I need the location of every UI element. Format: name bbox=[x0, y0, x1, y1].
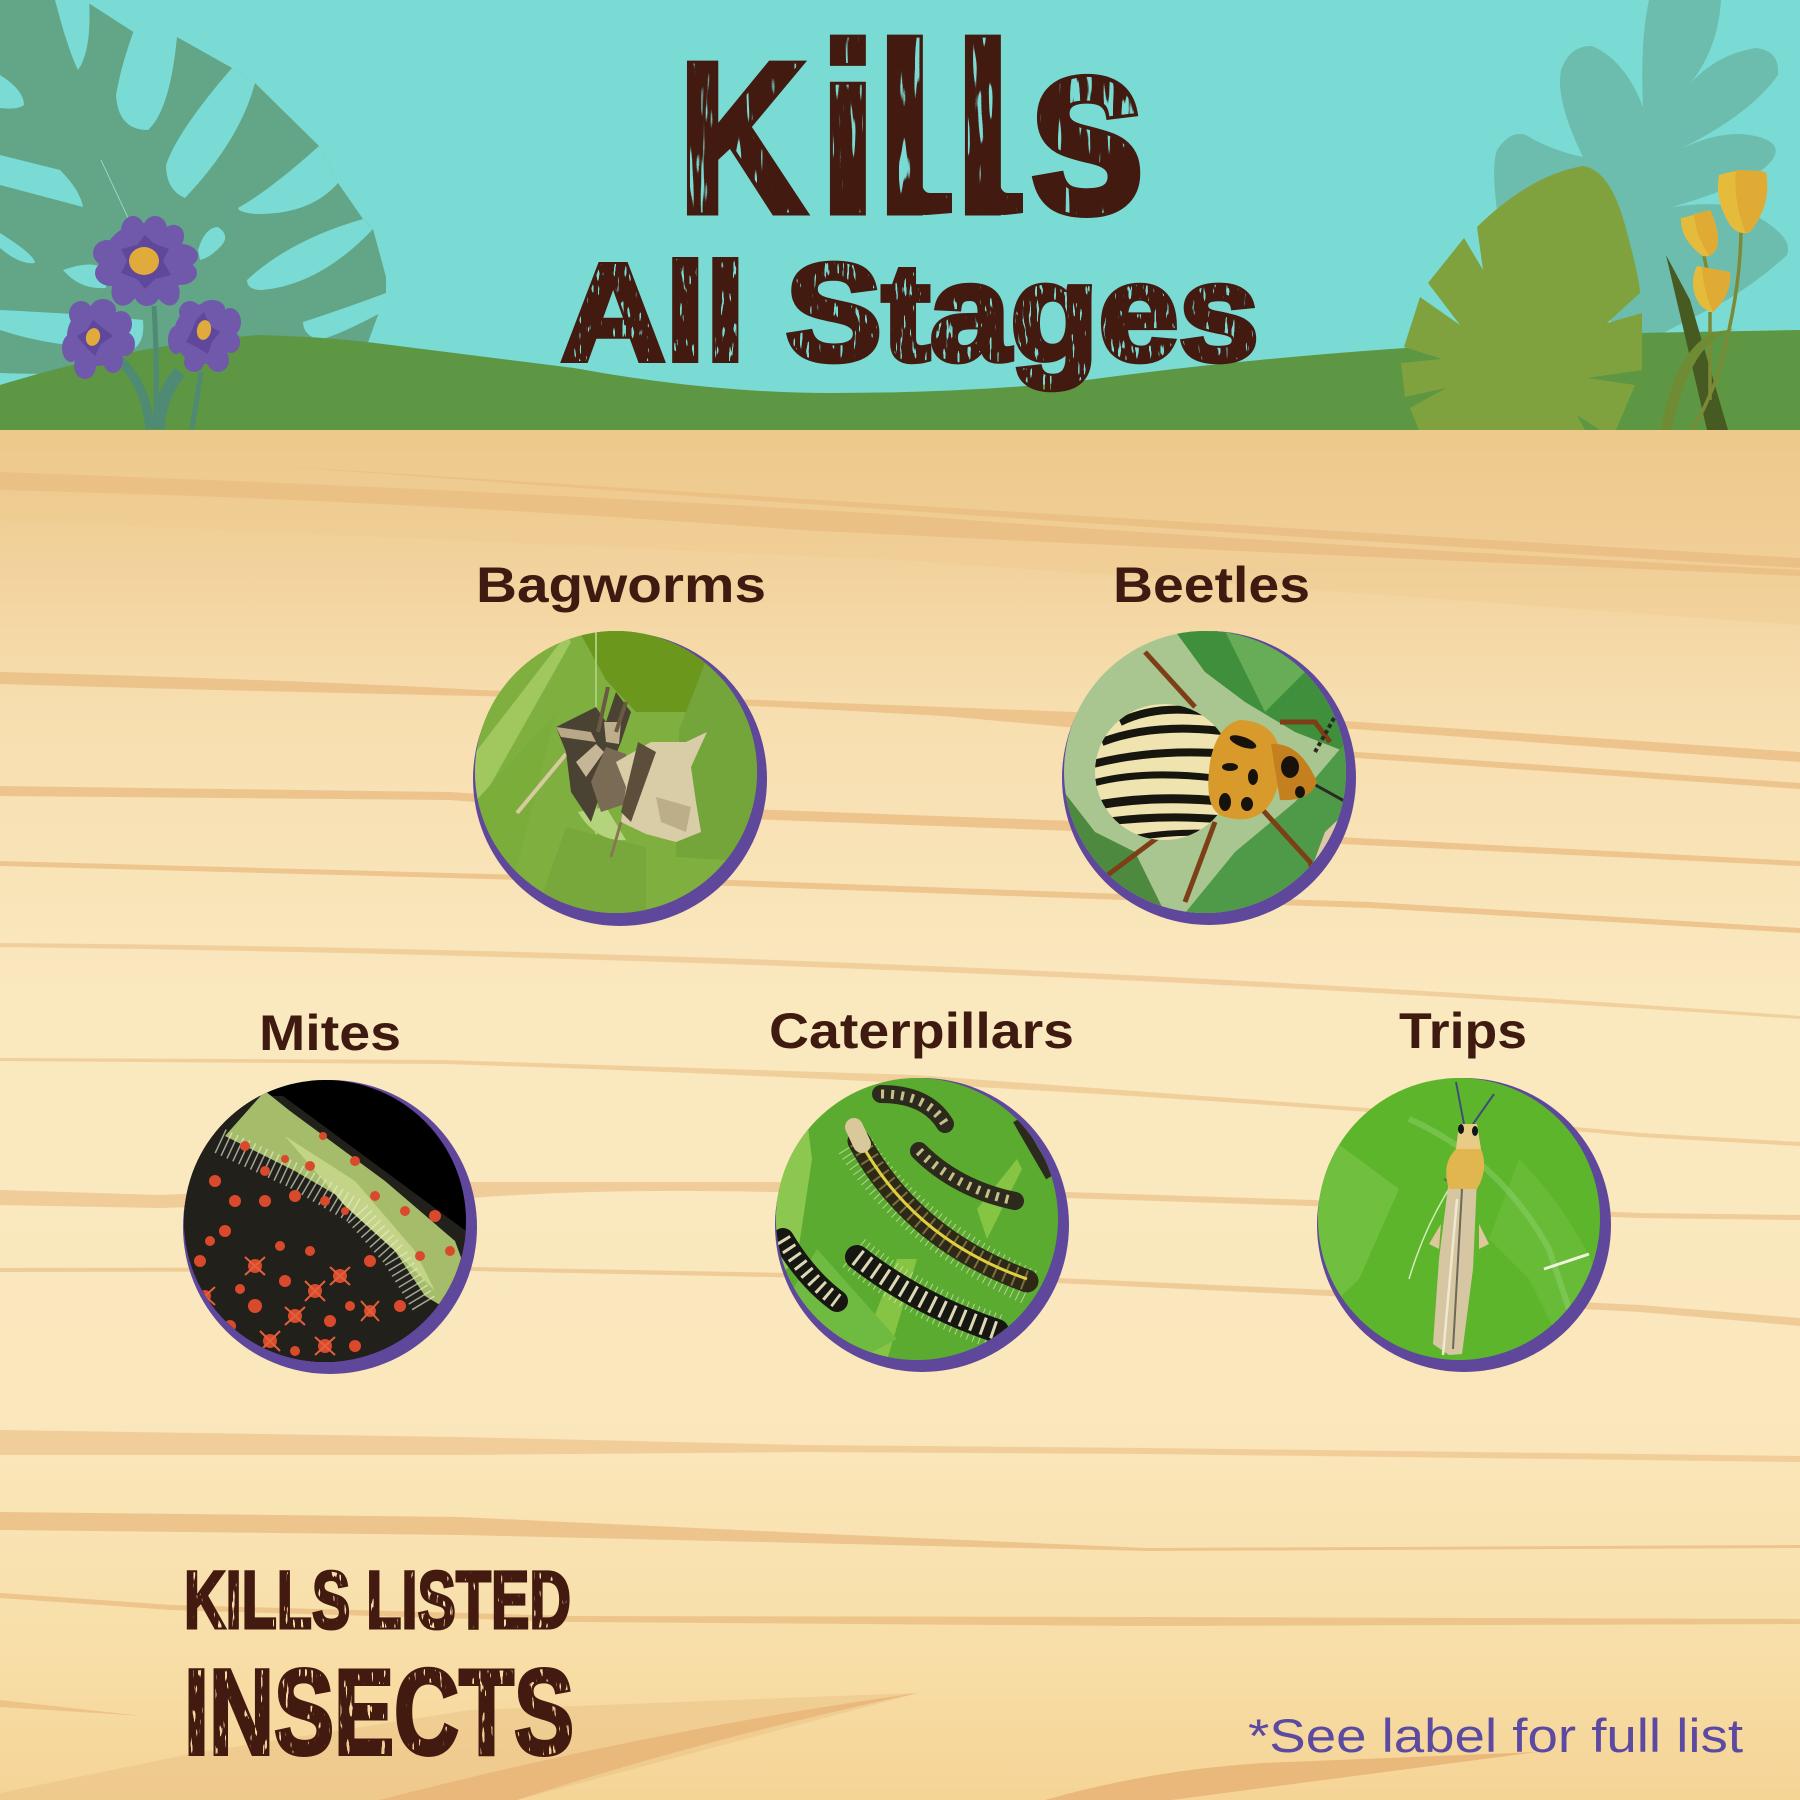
small left purple flower bbox=[62, 299, 135, 379]
wood grain streaks bbox=[0, 465, 1800, 1800]
title: Kills: l bbox=[875, 0, 935, 263]
heading: INSECTS: INSECTS bbox=[184, 1644, 574, 1780]
label: Mites: Mites bbox=[259, 1005, 401, 1061]
wood plank background bbox=[0, 430, 1800, 1800]
green blade bbox=[1661, 329, 1735, 430]
header sky background bbox=[0, 0, 1800, 430]
label: Caterpillars: Caterpillars bbox=[769, 1003, 1074, 1059]
title: Kills: l bbox=[953, 0, 1013, 263]
large tulip bbox=[1718, 171, 1767, 233]
flower stems bbox=[120, 306, 201, 429]
small right purple flower bbox=[168, 300, 241, 372]
title: Kills: K bbox=[678, 17, 806, 258]
tulip stems bbox=[1692, 232, 1741, 429]
label: Trips: Trips bbox=[1399, 1003, 1527, 1059]
footnote: *See label for full list bbox=[1248, 1709, 1743, 1762]
photo: Mites bbox=[183, 1080, 477, 1374]
label: Beetles: Beetles bbox=[1113, 557, 1310, 613]
wood upper shade layer bbox=[0, 430, 1800, 625]
large purple flower bbox=[93, 216, 198, 309]
left caterpillar bbox=[783, 1239, 837, 1301]
title: All Stages: All Stages bbox=[561, 236, 1259, 390]
low tulip bbox=[1693, 266, 1730, 312]
top caterpillar bbox=[881, 1094, 945, 1124]
title: Kills: i bbox=[818, 0, 878, 263]
heading: KILLS LISTED: KILLS LISTED bbox=[184, 1555, 571, 1646]
label: Bagworms: Bagworms bbox=[476, 557, 766, 613]
front green leaf right bbox=[1401, 166, 1642, 430]
dark grass blade bbox=[1666, 255, 1728, 430]
photo: Bagworms bbox=[473, 631, 767, 926]
main caterpillar bbox=[859, 1141, 1027, 1281]
left tulip bbox=[1681, 210, 1718, 256]
flowers left bbox=[62, 216, 241, 429]
second caterpillar bbox=[919, 1151, 1015, 1201]
photo: Beetles bbox=[1062, 631, 1356, 925]
back leaf right bbox=[1494, 0, 1788, 345]
monstera leaf left bbox=[0, 0, 386, 400]
photo: Caterpillars bbox=[775, 1078, 1069, 1372]
lower caterpillar bbox=[857, 1257, 997, 1331]
title: Kills bbox=[678, 0, 1146, 265]
tulips right bbox=[1661, 170, 1767, 430]
photo: Trips bbox=[1317, 1078, 1611, 1372]
hair fringe bbox=[220, 1141, 425, 1306]
ground hill bbox=[0, 330, 1800, 430]
caterpillar hairs bbox=[854, 1144, 1029, 1333]
